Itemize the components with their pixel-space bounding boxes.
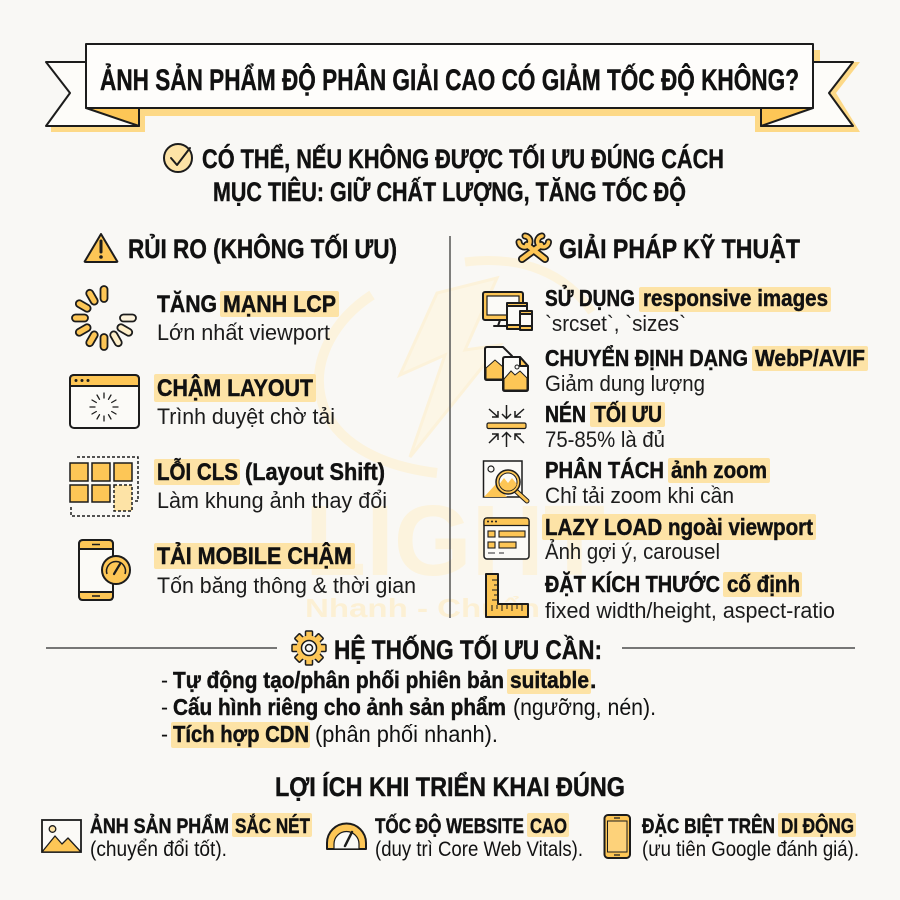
icon: responsive devices xyxy=(483,292,532,330)
left tail xyxy=(46,62,139,126)
benefit 1 note: (chuyển đổi tốt). xyxy=(90,838,227,861)
list line 3: - xyxy=(161,721,168,747)
list line 3: Tích hợp CDN xyxy=(173,721,309,747)
icon: compression arrows xyxy=(487,405,526,447)
highlight: mạnh LCP xyxy=(220,291,339,317)
solution 5 title: LAZY LOAD ngoài viewport xyxy=(545,514,813,540)
risk 1 title: TĂNG xyxy=(157,290,217,318)
risk 2 note: Trình duyệt chờ tải xyxy=(157,404,335,429)
benefit: sharp image xyxy=(42,813,312,861)
watermark logo: Nhanh - Chuẩn xyxy=(305,593,540,623)
risk 1 note: Lớn nhất viewport xyxy=(157,320,330,345)
column divider xyxy=(449,236,451,618)
right fold xyxy=(761,108,813,126)
risk 1 title: MẠNH LCP xyxy=(223,291,336,318)
highlight: sắc nét xyxy=(232,813,312,837)
highlight: tải mobile chậm xyxy=(154,543,355,569)
list line 3: (phân phối nhanh). xyxy=(315,721,498,747)
benefit 1 title: ẢNH SẢN PHẨM xyxy=(90,815,229,838)
list line 1: Tự động tạo/phân phối phiên bản xyxy=(173,667,504,693)
icon: picture xyxy=(42,820,81,852)
benefit 3 note: (ưu tiên Google đánh giá). xyxy=(642,838,859,861)
highlight: chậm layout xyxy=(154,374,316,402)
highlight: ảnh zoom xyxy=(668,458,770,483)
highlight: cao xyxy=(527,813,569,837)
solution 2 title: WebP/AVIF xyxy=(755,345,865,371)
icon: slow mobile xyxy=(79,540,130,600)
panel: risks xyxy=(70,286,416,600)
list line 2: Cấu hình riêng cho ảnh sản phẩm xyxy=(173,694,506,720)
solution 1 title: SỬ DỤNG xyxy=(545,283,635,311)
icon: lazy load window xyxy=(484,518,529,559)
highlight: tích hợp CDN xyxy=(171,722,310,748)
highlight: di động xyxy=(778,813,856,837)
icon: crossed tools xyxy=(519,236,548,259)
solution 6 title: cố định xyxy=(727,571,800,597)
benefit 2 title: CAO xyxy=(530,815,567,838)
risk 2 title: CHẬM LAYOUT xyxy=(157,374,313,402)
highlight: lỗi CLS xyxy=(154,459,240,485)
risk 4 note: Tốn băng thông & thời gian xyxy=(157,573,416,598)
heading: solutions: GIẢI PHÁP KỸ THUẬT xyxy=(559,232,800,264)
list line 2: - xyxy=(161,694,168,720)
icon: check badge xyxy=(164,144,192,172)
benefit 3 title: ĐẶC BIỆT TRÊN xyxy=(642,814,775,838)
solution 6 note: fixed width/height, aspect-ratio xyxy=(545,598,835,623)
solution 4 title: PHÂN TÁCH xyxy=(545,456,664,483)
list line 1: suitable xyxy=(510,667,589,693)
solution 4 title: ảnh zoom xyxy=(671,457,767,483)
icon: phone xyxy=(604,815,630,858)
highlight: lazy load xyxy=(542,514,816,540)
heading: risks: RỦI RO (KHÔNG TỐI ƯU) xyxy=(128,232,397,264)
highlight: suitable xyxy=(507,669,591,694)
solution 2 title: CHUYỂN ĐỊNH DẠNG xyxy=(545,344,748,371)
solution 1 title: responsive images xyxy=(643,285,828,311)
icon: warning triangle xyxy=(85,234,117,262)
icon: zoom image xyxy=(484,461,527,501)
risk 3 title: LỖI CLS xyxy=(157,457,238,486)
divider right xyxy=(622,647,855,649)
panel: solutions xyxy=(483,283,868,623)
benefit: high speed xyxy=(327,813,583,861)
solution 1 note: `srcset`, `sizes` xyxy=(545,311,686,336)
heading: benefits: LỢI ÍCH KHI TRIỂN KHAI ĐÚNG xyxy=(275,771,625,802)
watermark logo: LIGHT xyxy=(305,485,605,597)
icon: ruler xyxy=(486,574,528,617)
ribbon shadow xyxy=(51,50,860,132)
list line 2: (ngưỡng, nén). xyxy=(513,694,656,720)
icon: speed gauge xyxy=(327,824,366,849)
list: system needs xyxy=(161,667,656,748)
solution 4 note: Chỉ tải zoom khi cần xyxy=(545,483,734,508)
benefit 3 title: DI ĐỘNG xyxy=(781,814,854,838)
highlight: cố định xyxy=(723,572,802,597)
answer line 2: MỤC TIÊU: GIỮ CHẤT LƯỢNG, TĂNG TỐC ĐỘ xyxy=(213,175,686,207)
icon: image format files xyxy=(485,347,528,391)
divider left xyxy=(46,647,277,649)
answer line 1: CÓ THỂ, NẾU KHÔNG ĐƯỢC TỐI ƯU ĐÚNG CÁCH xyxy=(202,142,724,174)
heading: system needs: HỆ THỐNG TỐI ƯU CẦN: xyxy=(334,633,602,665)
risk 4 title: TẢI MOBILE CHẬM xyxy=(157,541,352,570)
highlight: responsive images xyxy=(639,287,831,312)
right tail xyxy=(761,62,853,126)
benefit 2 title: TỐC ĐỘ WEBSITE xyxy=(375,814,524,838)
solution 3 note: 75-85% là đủ xyxy=(545,427,665,452)
icon: browser loading xyxy=(70,375,139,428)
icon: gear xyxy=(292,631,326,665)
benefit 1 title: SẮC NÉT xyxy=(235,814,310,838)
benefit: mobile xyxy=(604,813,859,861)
icon: loading spinner xyxy=(72,286,136,350)
list line 1: - xyxy=(161,667,168,693)
risk 3 note: Làm khung ảnh thay đổi xyxy=(157,488,387,513)
title ribbon xyxy=(46,44,860,132)
highlight: tối ưu xyxy=(590,402,665,427)
benefit 2 note: (duy trì Core Web Vitals). xyxy=(375,838,583,861)
solution 6 title: ĐẶT KÍCH THƯỚC xyxy=(545,570,720,597)
solution 3 title: TỐI ƯU xyxy=(594,400,662,427)
solution 3 title: NÉN xyxy=(545,400,586,427)
left fold xyxy=(86,108,139,126)
icon: layout shift grid xyxy=(70,457,138,516)
risk 3 title: (Layout Shift) xyxy=(245,459,385,486)
highlight: WebP/AVIF xyxy=(752,346,868,371)
solution 5 note: Ảnh gợi ý, carousel xyxy=(545,539,720,564)
list line 1: . xyxy=(590,667,596,693)
solution 2 note: Giảm dung lượng xyxy=(545,371,705,396)
ribbon body xyxy=(86,44,813,108)
watermark logo xyxy=(305,260,605,623)
